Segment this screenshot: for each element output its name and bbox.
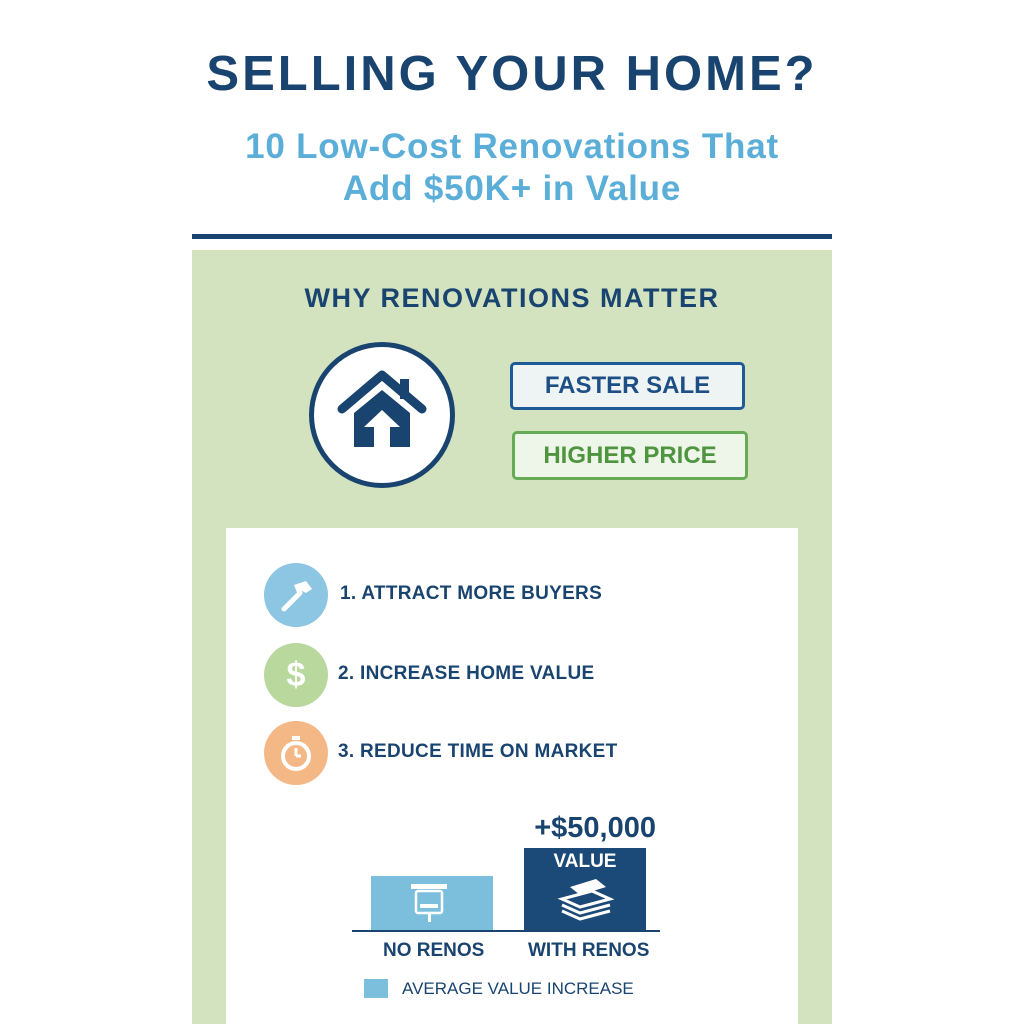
badge: higher price	[512, 431, 748, 480]
axis labels: NO RENOS	[383, 940, 484, 961]
icon: stopwatch	[264, 721, 328, 785]
panel: why renovations matter	[192, 250, 832, 1024]
legend	[364, 979, 388, 998]
item 3: 3. REDUCE TIME ON MARKET	[338, 741, 618, 762]
panel: white list	[226, 528, 798, 1024]
item 2	[264, 643, 594, 707]
bar chart: AVERAGE VALUE INCREASE	[402, 979, 634, 998]
icon: dollar: $	[287, 656, 305, 694]
title: SELLING YOUR HOME?	[206, 47, 818, 101]
bar: no renos	[371, 876, 493, 930]
bar chart: WITH RENOS	[528, 940, 649, 961]
icon: hammer	[264, 563, 328, 627]
bar: with renos: VALUE	[554, 851, 616, 872]
icon: house circle	[309, 342, 455, 488]
value label: +$50,000	[534, 812, 656, 844]
bar: with renos	[524, 848, 646, 930]
icon: dollar	[264, 643, 328, 707]
item 3	[264, 721, 618, 785]
badge: faster sale: FASTER SALE	[545, 372, 710, 399]
bar chart	[352, 812, 660, 998]
subtitle: Add $50K+ in Value	[343, 169, 681, 208]
item 1	[264, 563, 602, 627]
badge: higher price: HIGHER PRICE	[543, 442, 717, 469]
badge: faster sale	[510, 362, 745, 410]
subtitle	[245, 127, 779, 208]
item 2: 2. INCREASE HOME VALUE	[338, 663, 594, 684]
item 1: 1. ATTRACT MORE BUYERS	[340, 583, 602, 604]
subtitle: 10 Low-Cost Renovations That	[245, 127, 779, 166]
heading: WHY RENOVATIONS MATTER	[304, 283, 720, 313]
